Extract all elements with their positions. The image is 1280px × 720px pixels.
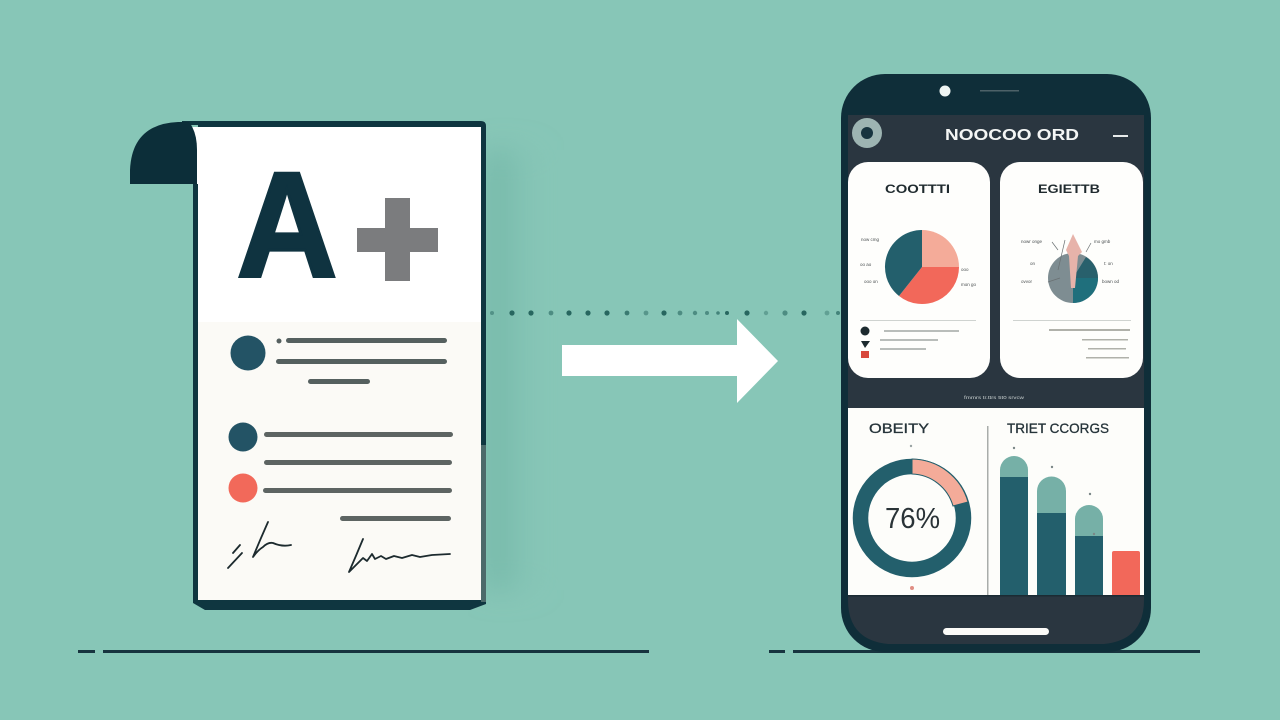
row: third bullet and lines [228,474,452,521]
divider [860,320,976,321]
pie labels [860,237,977,287]
donut chart [860,459,968,570]
icon: curled page corner [130,122,197,184]
pie labels: now cmg [861,237,880,242]
panel: right pie card [1000,162,1143,378]
panel: lower charts [848,408,1144,596]
phone [841,74,1151,652]
heading: left: OBEITY [869,420,930,436]
heading: EGIETTB [1038,182,1100,196]
pie labels: oo ao [860,262,872,267]
ground line: right [769,650,1200,653]
heading: right: TRIET CCORGS [1007,420,1109,436]
bar chart [1000,447,1140,596]
pie labels: t: on [1104,261,1113,266]
bar 1 [1000,456,1028,596]
caption lines [1049,329,1130,358]
pie labels [1021,239,1120,284]
pie labels: nowr onge [1021,239,1043,244]
home indicator [943,628,1049,635]
bar dots [1013,447,1095,535]
app title: NOOCOO ORD [945,127,1079,144]
donut value: 76% [885,503,940,535]
row: second bullet and lines [228,422,453,465]
heading: COOTTTI [885,182,950,196]
pie labels: mo gmb [1094,239,1111,244]
baseline [848,595,1144,596]
pie labels: ooo [961,267,969,272]
ground line: left [78,650,649,653]
icon: grey plus [357,198,438,281]
pie labels: ovvor [1021,279,1033,284]
pie chart [885,230,959,304]
app logo [852,118,882,148]
menu dash [1113,135,1128,137]
divider [1013,320,1131,321]
pie labels: ooo on [864,279,878,284]
dots [910,445,914,590]
bar 2 [1037,476,1066,596]
dotted connector [490,310,840,316]
pie labels: bown od [1102,279,1120,284]
pie labels: mon go [961,282,977,287]
camera [940,86,950,96]
pie labels: on [1030,261,1036,266]
grade letter A: A [236,140,338,308]
document: A+ report card [130,121,486,610]
legend icons [860,326,870,358]
pie chart [1048,234,1098,303]
legend lines [880,330,959,350]
speaker [980,90,1019,92]
panel: left pie card [848,162,990,378]
signature: left [228,522,291,568]
vertical divider [987,426,988,596]
signature: right [349,539,450,572]
small caption: fmmrs tr.ttrs 5t0 srvcw [964,395,1025,400]
bar 3 [1075,505,1103,596]
bar 4 [1112,551,1140,596]
leader lines [1048,240,1091,282]
row: first bullet and lines [230,336,447,384]
arrow [562,319,778,403]
